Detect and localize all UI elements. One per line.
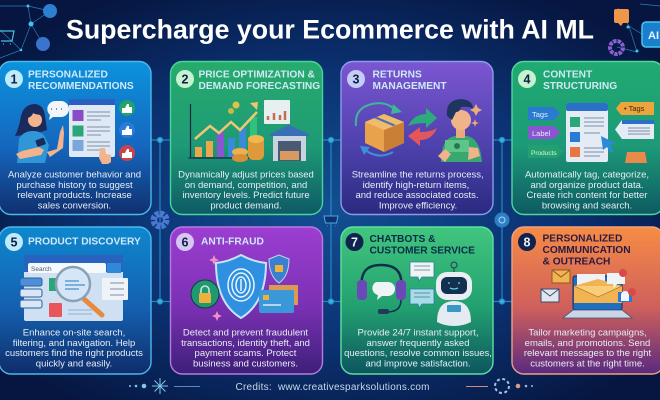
body text 7: and improve satisfaction. [365,358,471,370]
badge 6 [176,233,194,251]
badge 3 [347,70,365,88]
heading 4: CONTENT [543,70,593,80]
panel 5: product discovery [0,227,151,374]
body text 6: transactions, identity theft, and [181,338,310,349]
body text 2: Dynamically adjust prices based [178,170,314,180]
panel 4: content structuring [512,62,660,214]
body text 8: Tailor marketing campaigns, [528,328,647,338]
badge 4: 4 [524,72,531,86]
heading 8: PERSONALIZED [542,234,622,244]
panel 8: personalized communication [512,227,660,374]
heading 2: PRICE OPTIMIZATION & [198,70,316,80]
heading 7: CHATBOTS & [370,234,436,245]
network decoration: top left [0,4,57,58]
icon: cart [324,216,338,226]
illustration: price chart, coins and warehouse [188,100,309,162]
body text 8: emails, and promotions. Send [525,338,650,349]
illustration: headset and robot [357,262,472,326]
body text 7: questions, resolve common issues, [344,348,492,359]
body text 1: purchase history to suggest [16,180,133,191]
badge 6: 6 [182,236,189,250]
footer decoration right [466,379,533,393]
badge 7: 7 [351,236,358,250]
body text 4: Automatically tag, categorize, [525,170,649,180]
heading 2: DEMAND FORECASTING [198,81,320,92]
body text 6: business and customers. [193,358,298,370]
badge 5: 5 [11,236,18,250]
heading 8: & OUTREACH [542,256,610,268]
body text 3: Streamline the returns process, [352,170,484,180]
body text 6: Detect and prevent fraudulent [183,328,308,338]
connector lines [151,138,512,304]
body text 8: relevant messages to the right [524,348,651,359]
body text 5: customers find the right products [5,348,143,359]
body text 6: payment scams. Protect [195,348,297,359]
heading 1: RECOMMENDATIONS [28,81,134,92]
body text 4: Create rich content for better [527,190,647,201]
heading 3: RETURNS [372,70,422,80]
credits: Credits: www.creativesparksolutions.com [236,382,430,393]
illustration: returned box, arrows and person [356,99,482,162]
badge 5 [5,233,23,251]
body text 8: customers at the right time. [530,358,645,370]
illustration: tags and content list: Tags [532,110,548,119]
heading 8: COMMUNICATION [542,245,631,256]
heading 3: MANAGEMENT [372,81,447,92]
body text 1: sales conversion. [38,200,111,211]
body text 5: filtering, and navigation. Help [13,338,135,349]
illustration: tags and content list: Label [532,129,551,138]
heading 7: CUSTOMER SERVICE [370,246,475,256]
network decoration: top right [610,4,660,54]
illustration: shopper with recommendation list [15,99,135,164]
badge 1 [5,70,23,88]
badge 4 [518,70,536,88]
body text 1: Analyze customer behavior and [8,170,141,180]
body text 4: browsing and search. [542,200,632,211]
illustration: tags and content list: Products [531,150,557,157]
badge 7 [346,233,364,251]
footer decoration left [129,378,200,394]
heading 6: ANTI-FRAUD [201,236,264,248]
badge 8 [518,233,536,251]
badge 8: 8 [524,236,531,250]
body text 1: relevant products. Increase [17,190,132,201]
body text 5: quickly and easily. [36,358,112,370]
panel 6: anti-fraud [170,227,322,374]
badge 2 [176,70,194,88]
heading 4: STRUCTURING [543,81,617,92]
body text 4: and organize product data. [530,180,644,191]
body text 3: identify high-return items, [363,180,469,191]
body text 3: Improve efficiency. [379,200,457,211]
illustration: tags and content list [528,102,654,163]
icon: globe right [494,212,510,228]
icon: gear left [153,213,167,227]
body text 3: and reduce associated costs. [355,190,479,201]
body text 7: answer frequently asked [367,338,469,349]
panel 1: personalized recommendations [0,62,151,214]
body text 7: Provide 24/7 instant support, [358,328,478,338]
panel 2: price optimization [170,62,322,214]
heading 5: PRODUCT DISCOVERY [28,236,141,248]
badge 1: 1 [11,72,18,86]
title: Supercharge your Ecommerce with AI ML [66,14,594,44]
body text 2: inventory levels. Predict future [182,190,310,201]
illustration: tags and content list: • Tags [624,104,645,113]
body text 2: on demand, competition, and [185,180,307,191]
network decoration: top right: AI [648,30,659,42]
panel 7: chatbots [341,227,493,374]
illustration: laptop, envelopes and notifications [541,269,636,318]
badge 2: 2 [182,72,189,86]
body text 2: product demand. [210,200,282,211]
panel 3: returns management [341,62,493,214]
illustration: shield, locks and card [191,255,298,321]
body text 5: Enhance on-site search, [23,328,125,338]
illustration: search window with magnifier: Search [31,266,52,273]
badge 3: 3 [353,72,360,86]
heading 1: PERSONALIZED [28,70,108,80]
illustration: search window with magnifier [20,255,128,321]
